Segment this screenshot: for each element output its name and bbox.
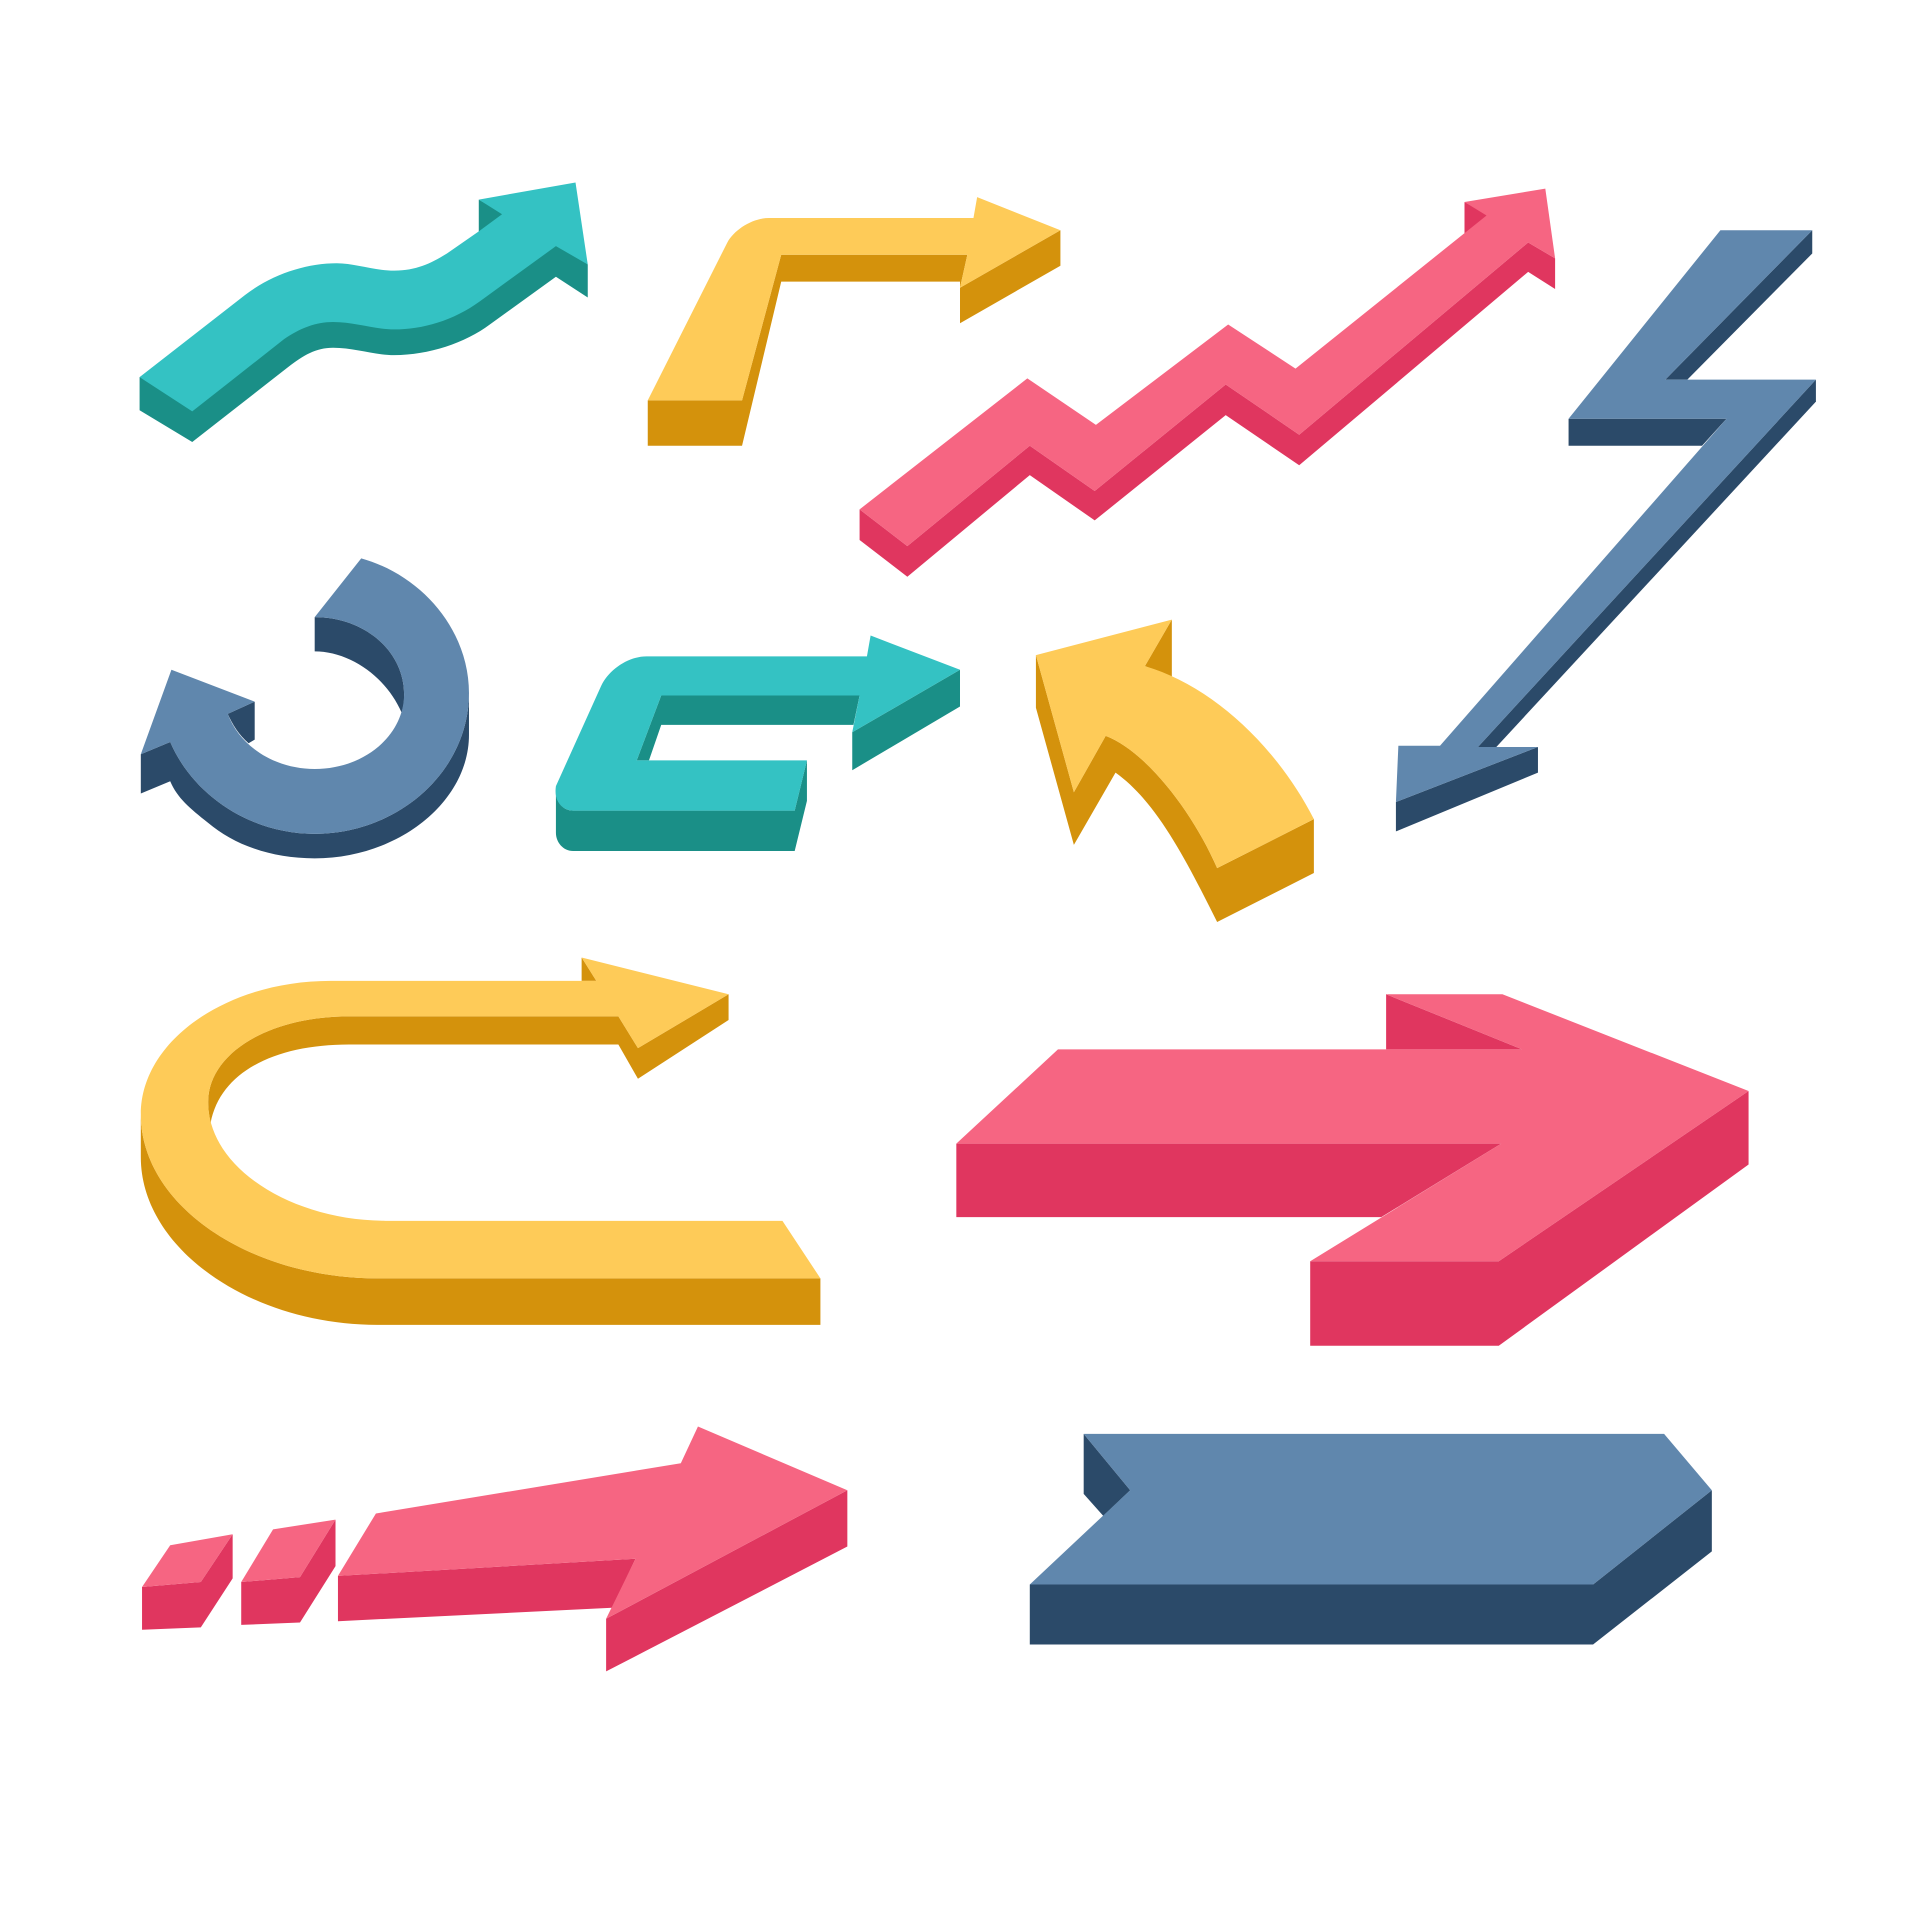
icon: yellow bent arrow: [648, 197, 1060, 446]
icon: yellow U-turn arrow: [141, 958, 820, 1325]
icon: pink zigzag arrow: [860, 189, 1555, 577]
icon: pink dashed-tail arrow: [142, 1427, 847, 1671]
icon: teal wavy arrow: [140, 182, 588, 442]
icon: large pink arrow: [956, 994, 1749, 1346]
icon: blue chevron banner arrow: [1030, 1434, 1712, 1644]
icon: blue lightning arrow: [1396, 230, 1816, 831]
icon: blue circular arrow: [141, 558, 469, 858]
icon: yellow curved up arrow: [1036, 620, 1314, 922]
icon: teal hook arrow: [556, 636, 960, 851]
